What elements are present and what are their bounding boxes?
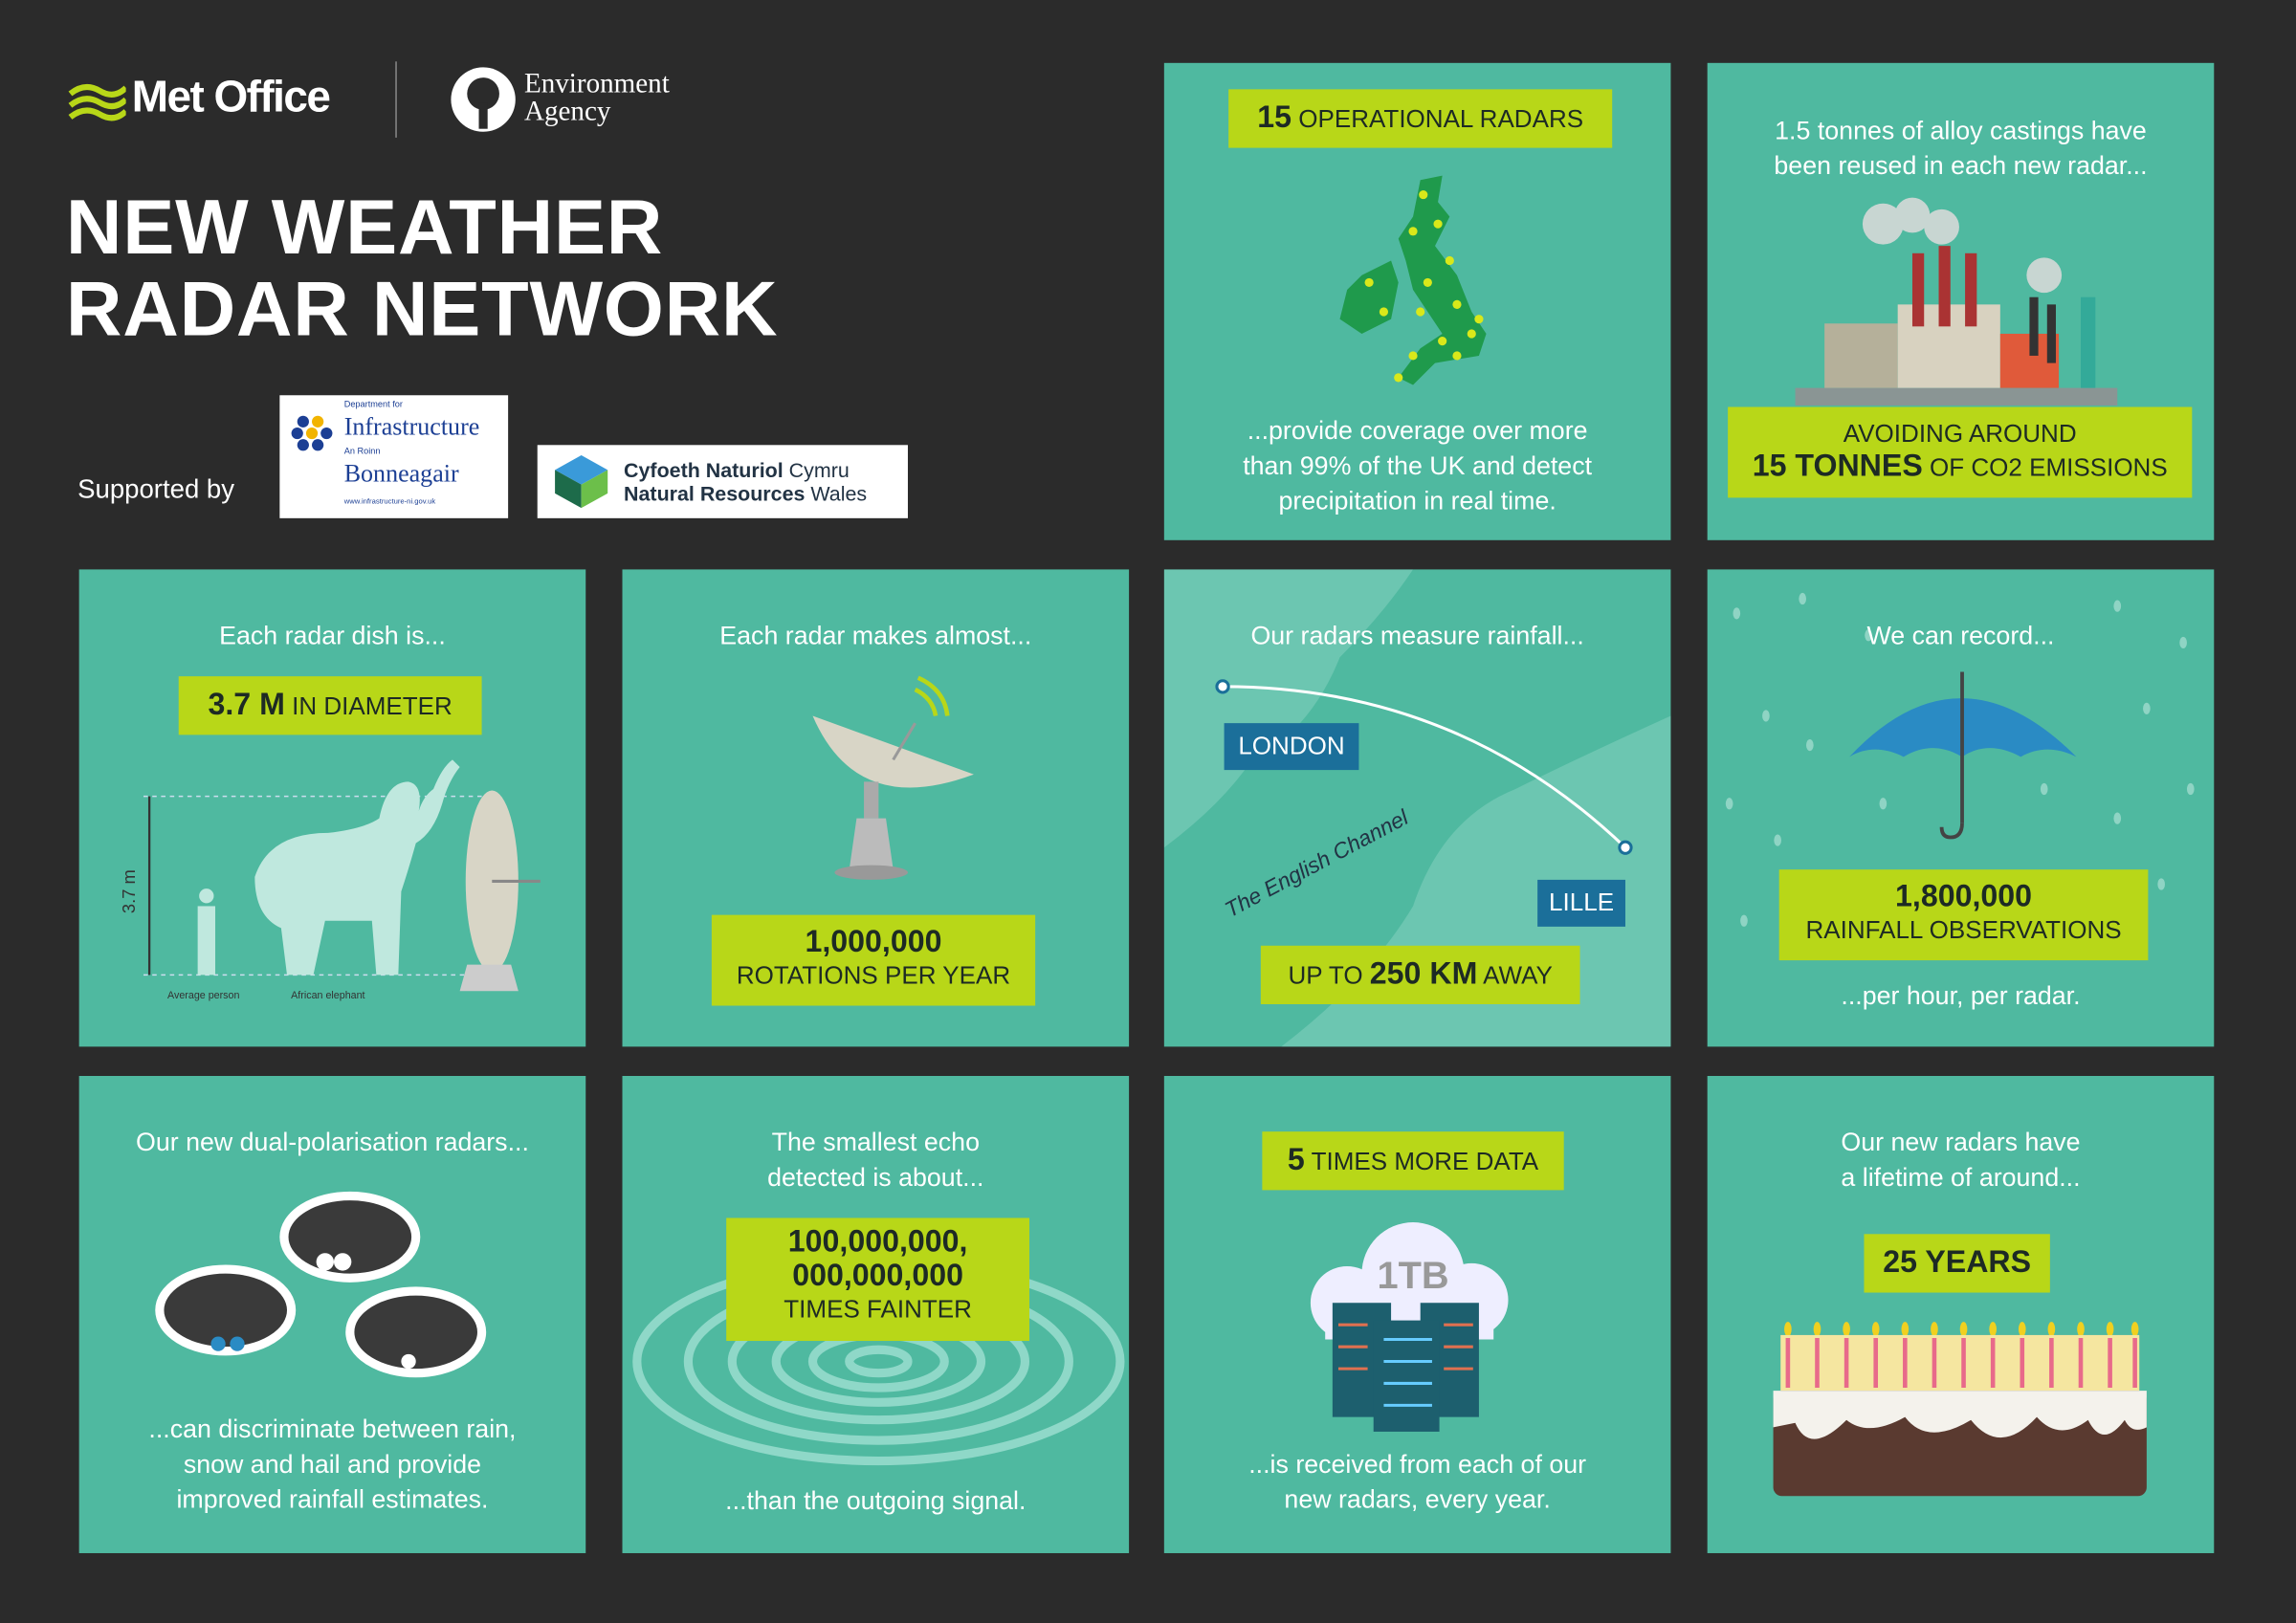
raindrops background [1726,593,2195,927]
tag: avoiding 15 tonnes: AVOIDING AROUND [1843,420,2077,448]
icon: clouds [155,1192,486,1377]
panel: rainfall observations [1708,569,2214,1046]
text: outgoing: ...than the outgoing signal. [725,1486,1026,1515]
text: rainfall: Our radars measure rainfall... [1250,621,1584,650]
text: received [1248,1449,1586,1514]
label: London [1225,723,1358,770]
icon: elephant and dish scale: 3.7 m [119,869,139,913]
text: coverage [1243,416,1592,515]
text: lifetime [1841,1128,2081,1192]
icon: elephant and dish scale [119,759,541,1001]
tag: 250km [1261,946,1580,1004]
label: Lille: LILLE [1549,888,1614,916]
text: alloy: been reused in each new radar... [1774,151,2148,180]
icon: UK map [1339,176,1487,384]
text: per hour: ...per hour, per radar. [1841,981,2081,1010]
supported by text: Supported by [77,474,234,504]
title [66,185,778,353]
tag: 1,000,000 rotations: ROTATIONS PER YEAR [737,962,1010,990]
icon: cloud servers: 1TB [1377,1255,1449,1297]
text: discriminate [148,1415,517,1514]
icon: cloud servers [1311,1222,1508,1432]
text: alloy [1774,116,2148,180]
logo: Natural Resources Wales [538,445,908,518]
tag: avoiding 15 tonnes [1728,407,2192,497]
tag: 250km: UP TO 250 KM AWAY [1288,957,1553,991]
text: each radar makes: Each radar makes almost... [719,621,1031,650]
text: coverage: precipitation in real time. [1278,486,1556,515]
panel: 5 times more data [1164,1076,1670,1553]
logo: Environment Agency: Agency [524,97,610,127]
logo: Department for Infrastructure [279,395,508,518]
tag: 1,800,000: RAINFALL OBSERVATIONS [1805,916,2122,944]
icon: elephant and dish scale: Average person [167,990,239,1001]
logo: Department for Infrastructure: Infrastructure [344,413,479,441]
tag: 1,800,000: 1,800,000 [1895,880,2032,913]
panel: dish diameter [79,569,585,1046]
text: lifetime: Our new radars have [1841,1128,2081,1156]
panel: rotations [623,569,1129,1046]
logo: Environment Agency: Environment [524,69,670,99]
text: dual-pol: Our new dual-polarisation radars... [136,1128,529,1156]
tag: huge number [726,1217,1029,1341]
map background [1164,570,1670,1046]
tag: huge number: 000,000,000 [792,1259,963,1293]
icon: umbrella [1850,671,2076,840]
text: received: new radars, every year. [1284,1484,1551,1514]
panel: alloy castings [1708,63,2214,540]
tag: huge number: TIMES FAINTER [784,1296,972,1324]
text: coverage: ...provide coverage over more [1247,416,1588,445]
text: smallest echo: detected is about... [767,1162,983,1192]
map background: The English Channel [1221,804,1413,922]
tag: 5 times: 5 TIMES MORE DATA [1288,1143,1538,1177]
panel: lifetime [1708,1076,2214,1553]
text: we can record: We can record... [1866,621,2054,650]
tag: 3.7 m [179,676,482,735]
text: discriminate: snow and hail and provide [184,1449,481,1479]
icon: factory [1795,197,2118,406]
tag: 1,000,000 rotations: 1,000,000 [806,925,942,959]
logo: Environment Agency [451,67,670,132]
logo: Department for Infrastructure: www.infrastructure-ni.gov.uk [344,497,435,507]
icon: cake [1774,1322,2147,1496]
logo: Met Office: Met Office [132,74,329,121]
panel: 250km [1164,569,1670,1046]
logo: Natural Resources Wales: Natural Resources Wales [624,482,867,505]
text: smallest echo: The smallest echo [772,1128,980,1156]
panel: dual polarisation [79,1076,585,1553]
text: alloy: 1.5 tonnes of alloy castings have [1775,116,2147,145]
title: NEW WEATHER [66,185,663,271]
panel: smallest echo [623,1076,1129,1553]
text: discriminate: ...can discriminate between rain, [148,1415,517,1443]
text: lifetime: a lifetime of around... [1841,1162,2081,1192]
icon: elephant and dish scale: African elephant [291,990,365,1001]
panel: 15 operational radars [1164,63,1670,540]
tag: 15 radars: 15 OPERATIONAL RADARS [1257,101,1583,135]
logo: Department for Infrastructure: Department for [344,401,403,410]
text: coverage: than 99% of the UK and detect [1243,450,1592,480]
tag: 1,800,000 [1779,869,2148,960]
logo: Department for Infrastructure: Bonneagair [344,460,459,488]
tag: 15 radars [1228,89,1612,148]
text: each radar dish: Each radar dish is... [219,621,446,650]
title: RADAR NETWORK [66,267,778,353]
tag: huge number: 100,000,000, [788,1225,967,1259]
tag: 25 years [1864,1234,2050,1293]
tag: avoiding 15 tonnes: 15 TONNES OF CO2 EMISSIONS [1753,450,2168,483]
tag: 25 years: 25 YEARS [1883,1246,2031,1280]
text: smallest echo [767,1128,983,1192]
tag: 3.7 m: 3.7 M IN DIAMETER [208,688,453,722]
tag: 5 times [1262,1131,1564,1190]
text: discriminate: improved rainfall estimates. [176,1484,488,1514]
tag: 1,000,000 rotations [712,915,1035,1006]
label: Lille [1537,880,1625,927]
label: London: LONDON [1238,732,1345,759]
icon: ripples [632,1280,1125,1465]
logo: Department for Infrastructure: An Roinn [344,448,380,457]
text: received: ...is received from each of our [1248,1449,1586,1479]
logo: Natural Resources Wales: Cyfoeth Naturiol Cymru [624,458,850,482]
icon: satellite dish [813,675,974,880]
